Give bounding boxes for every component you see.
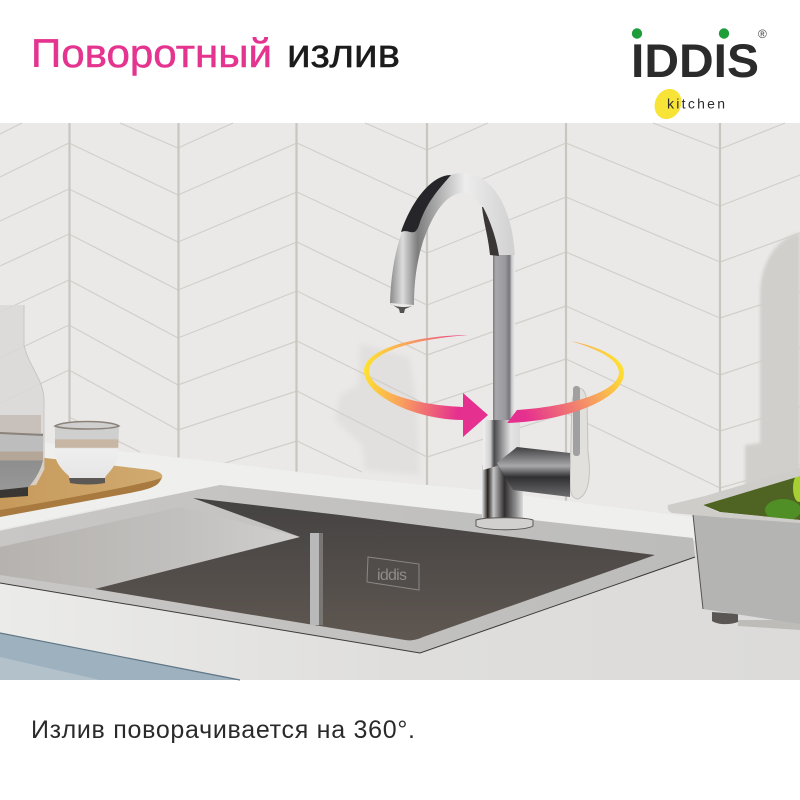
lever handle (570, 388, 589, 499)
basin seam right (319, 533, 323, 625)
basket with limes (668, 468, 800, 630)
basket inside greens (703, 476, 800, 520)
logo green dots (632, 28, 729, 39)
faucet (390, 173, 589, 530)
glass left (0, 433, 43, 498)
tile wall (0, 123, 800, 523)
basket rim (668, 468, 800, 523)
shadow of faucet on wall right (745, 233, 800, 490)
logo wordmark: IDDIS (631, 34, 759, 87)
chevron grout lines (0, 123, 800, 505)
spout dark reflection (401, 175, 451, 232)
title: Поворотный (31, 32, 272, 76)
photo: kitchen scene (0, 123, 800, 680)
sink dark basin (95, 498, 655, 640)
sink logo plate: iddis (377, 567, 407, 584)
base flange (476, 518, 533, 530)
spout (390, 173, 515, 422)
basket shadow (738, 620, 800, 630)
mixer body (497, 447, 570, 497)
sink left wall (0, 507, 300, 589)
arrow left arc (364, 335, 488, 437)
basket left edge (693, 515, 703, 609)
caption: Излив поворачивается на 360°. (31, 716, 415, 744)
aerator tip (390, 303, 414, 313)
sink steel plate (0, 485, 695, 653)
basin corner seam (310, 533, 319, 625)
upper collar (483, 420, 520, 470)
basket body (693, 515, 800, 624)
rotation arrow (364, 335, 624, 437)
sink logo plate (367, 557, 419, 590)
countertop (0, 438, 800, 680)
counter light back area (0, 438, 800, 545)
glass right (55, 422, 119, 484)
carafe (0, 305, 44, 488)
faucet body lower (482, 465, 523, 523)
registered mark: ® (758, 27, 767, 41)
shadow on wall center (335, 343, 420, 475)
wooden tray (0, 458, 162, 517)
carafe water (0, 415, 41, 433)
title: излив (287, 32, 400, 76)
yellow blob (650, 84, 686, 124)
basket foot (712, 612, 738, 624)
logo: IDDIS kitchen (631, 27, 767, 124)
sink plate front shadow edge (0, 557, 695, 653)
handle strip (573, 386, 580, 456)
spout tube (493, 255, 515, 423)
sink plate highlight edge (0, 507, 110, 530)
limes (765, 474, 800, 521)
title (31, 32, 400, 76)
spout bend reflection (482, 207, 499, 256)
cabinet front (0, 633, 240, 680)
kitchen label: kitchen (667, 96, 725, 112)
arrow right arc (507, 341, 624, 423)
